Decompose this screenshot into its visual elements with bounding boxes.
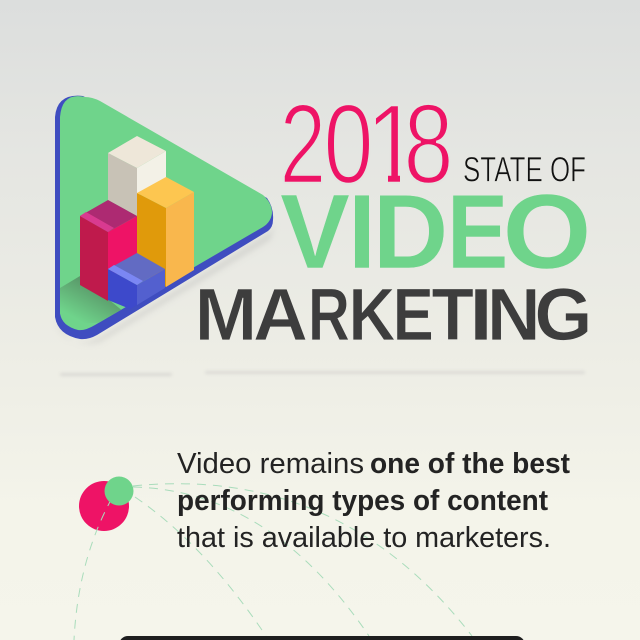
title: 2018: 8	[404, 81, 454, 207]
title: VIDEO	[280, 173, 592, 291]
intro text	[177, 448, 570, 554]
line 1 bold: one of the best	[370, 448, 570, 480]
play triangle logo with isometric bars	[55, 96, 276, 344]
title: MARKETING: E	[393, 273, 434, 356]
title: MARKETING	[195, 273, 592, 356]
title: VIDEO: I	[348, 173, 376, 291]
yellow bar	[137, 177, 194, 287]
blue bar	[108, 253, 165, 309]
floor shadow	[60, 276, 124, 325]
title: STATE OF: STATE OF	[463, 150, 586, 190]
title: 2018	[284, 104, 449, 183]
cream bar	[108, 136, 166, 216]
title: VIDEO: E	[447, 173, 508, 291]
title: MARKETING: I	[469, 273, 493, 356]
title: 2018: 1	[365, 81, 420, 207]
title: VIDEO: V	[280, 173, 350, 291]
title: MARKETING: K	[349, 273, 395, 356]
title: MARKETING: A	[253, 273, 308, 356]
play triangle blue edge	[55, 96, 273, 339]
title: MARKETING: M	[195, 273, 257, 356]
title underline shadows	[60, 371, 585, 376]
title: VIDEO: O	[502, 173, 592, 291]
pink bar	[80, 200, 137, 301]
line 3 regular: that is available to marketers.	[177, 522, 551, 554]
title: 2018: 2	[280, 81, 326, 207]
title: MARKETING: N	[487, 273, 541, 356]
title: MARKETING: T	[432, 273, 474, 356]
dashed connector arcs	[74, 484, 472, 640]
title: 2018: 0	[324, 81, 374, 207]
pink dot	[79, 481, 129, 531]
play triangle green face	[60, 96, 272, 330]
title: VIDEO: D	[373, 173, 448, 291]
black panel top edge	[119, 636, 525, 640]
line 1 regular: Video remains	[177, 448, 364, 480]
title: MARKETING: G	[534, 273, 592, 356]
line 2 bold: performing types of content	[177, 485, 548, 517]
title: MARKETING: R	[308, 273, 350, 356]
green dot	[104, 476, 134, 506]
